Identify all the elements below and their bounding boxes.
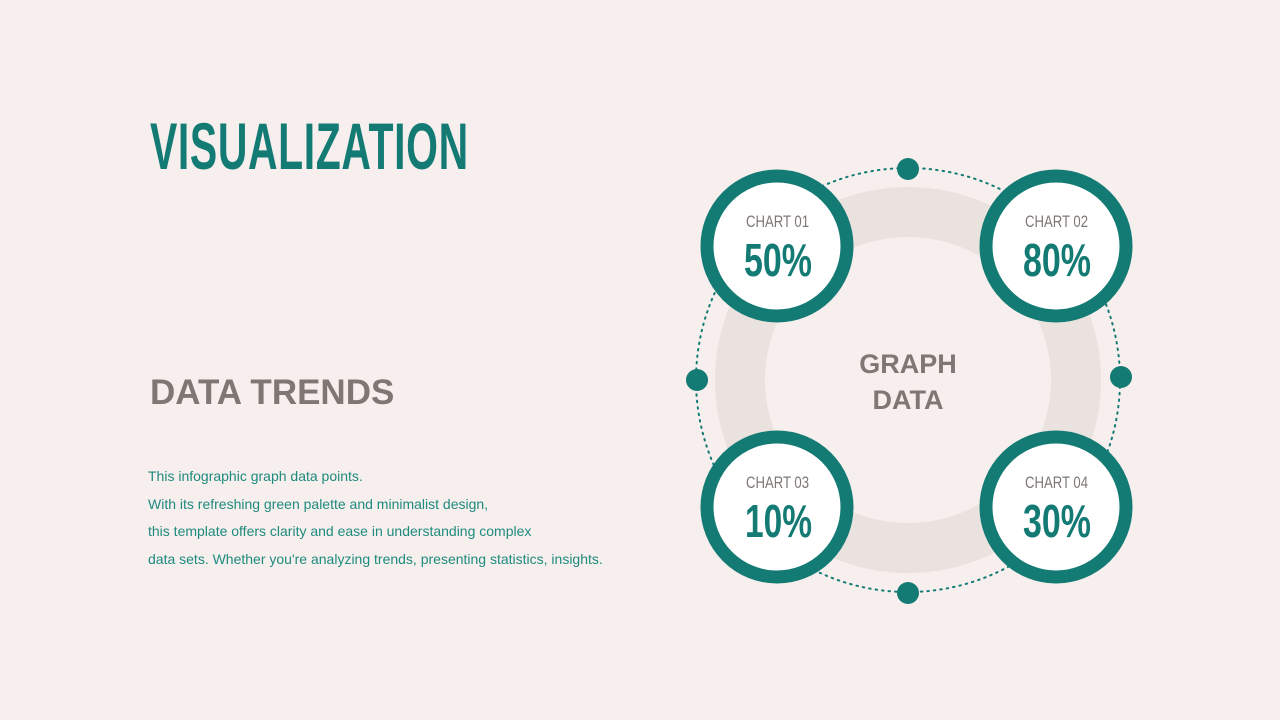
text block xyxy=(148,468,603,567)
center label: GRAPH xyxy=(859,349,957,379)
background ring xyxy=(740,212,1076,548)
chart 01 xyxy=(707,176,847,316)
center label xyxy=(859,349,957,415)
chart 02 xyxy=(986,176,1126,316)
text block: this template offers clarity and ease in understanding complex xyxy=(148,523,531,539)
chart 02: CHART 02 xyxy=(1025,212,1088,231)
chart 04: 30% xyxy=(1023,495,1091,547)
chart 01: 50% xyxy=(744,234,812,286)
chart 03 xyxy=(707,437,847,577)
text block: This infographic graph data points. xyxy=(148,468,363,484)
center label: DATA xyxy=(873,385,943,415)
chart 04 xyxy=(986,437,1126,577)
chart 03: 10% xyxy=(745,495,812,547)
chart 02: 80% xyxy=(1023,234,1091,286)
subtitle: DATA TRENDS xyxy=(150,373,394,412)
chart 04: CHART 04 xyxy=(1025,473,1088,492)
title: VISUALIZATION xyxy=(150,109,469,183)
orbit dots xyxy=(686,158,1132,604)
chart 01: CHART 01 xyxy=(746,212,809,231)
chart 03: CHART 03 xyxy=(746,473,809,492)
text block: data sets. Whether you're analyzing trends, presenting statistics, insights. xyxy=(148,551,603,567)
dotted orbit xyxy=(696,168,1120,592)
text block: With its refreshing green palette and minimalist design, xyxy=(148,496,488,512)
